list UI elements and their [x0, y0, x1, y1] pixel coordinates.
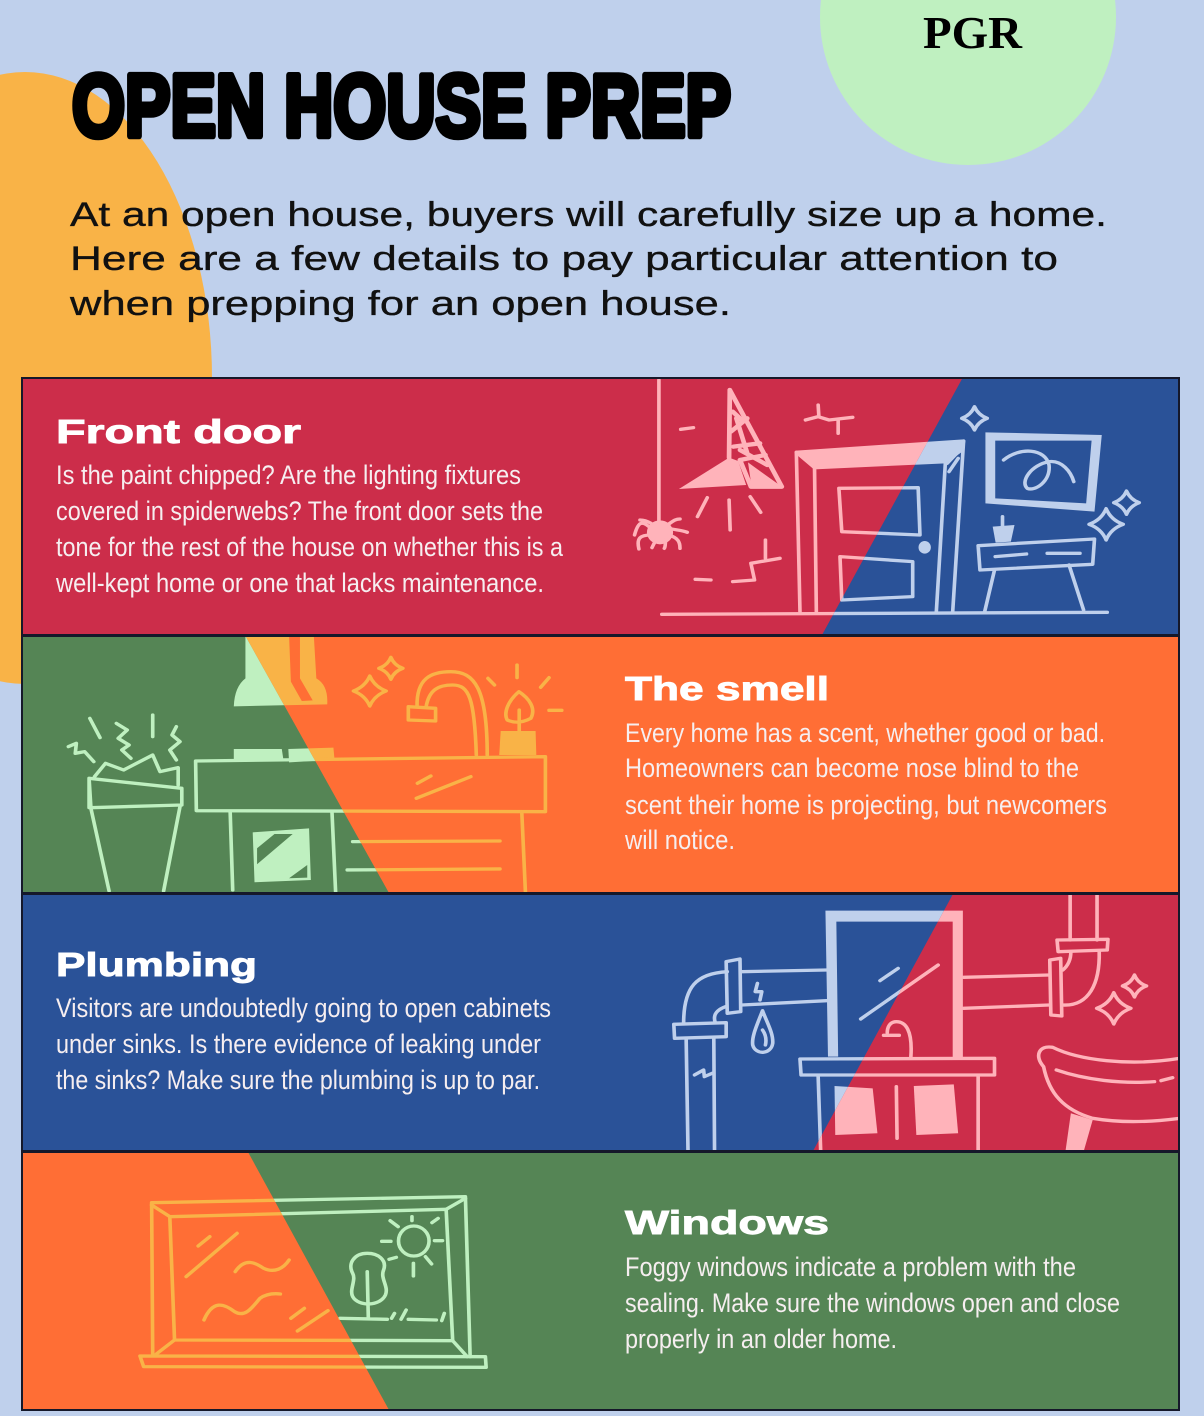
panel: plumbing — [22, 893, 1180, 1152]
illustration: pipes, vanity and bathtub — [674, 893, 1180, 1152]
illustration: front door and hallway — [635, 380, 1139, 614]
title: OPEN HOUSE PREP — [72, 56, 731, 155]
logo: PGR: PGR — [923, 7, 1023, 58]
intro text: when prepping for an open house. — [69, 285, 731, 323]
heading: front door: Front door — [56, 413, 301, 450]
body text: windows: properly in an older home. — [625, 1324, 897, 1354]
illustration: window with sun and tree — [140, 1197, 486, 1367]
body text: front door — [55, 460, 564, 598]
orange arch shape — [0, 72, 212, 684]
panel: the smell — [22, 635, 1179, 893]
body text: plumbing: Visitors are undoubtedly going to open cabinets — [56, 993, 551, 1023]
body text: plumbing: the sinks? Make sure the plumbing is up to par. — [56, 1065, 540, 1095]
body text: windows: Foggy windows indicate a problem with the — [625, 1252, 1076, 1282]
body text: windows — [625, 1252, 1120, 1354]
body text: the smell: scent their home is projecting, but newcomers — [625, 790, 1107, 820]
body text: the smell — [624, 718, 1107, 855]
body text: front door: covered in spiderwebs? The front door sets the — [56, 496, 543, 526]
body text: plumbing: under sinks. Is there evidence of leaking under — [56, 1029, 541, 1059]
intro text: Here are a few details to pay particular attention to — [70, 240, 1058, 278]
body text: front door: well-kept home or one that lacks maintenance. — [55, 568, 544, 598]
heading: the smell: The smell — [625, 670, 829, 707]
body text: front door: Is the paint chipped? Are the lighting fixtures — [56, 460, 521, 490]
panel: windows — [22, 1152, 1179, 1410]
heading: windows: Windows — [625, 1204, 829, 1241]
panel: front door — [22, 378, 1179, 635]
body text: the smell: Homeowners can become nose blind to the — [625, 753, 1079, 783]
intro text: At an open house, buyers will carefully size up a home. — [70, 196, 1107, 234]
body text: front door: tone for the rest of the house on whether this is a — [56, 532, 564, 562]
intro text — [69, 196, 1107, 323]
body text: windows: sealing. Make sure the windows open and close — [625, 1288, 1120, 1318]
heading: plumbing: Plumbing — [56, 946, 257, 983]
body text: the smell: Every home has a scent, whether good or bad. — [625, 718, 1105, 748]
green circle — [820, 0, 1116, 165]
body text: plumbing — [56, 993, 551, 1095]
body text: the smell: will notice. — [624, 825, 735, 855]
illustration: kitchen sink and trash — [68, 635, 562, 892]
